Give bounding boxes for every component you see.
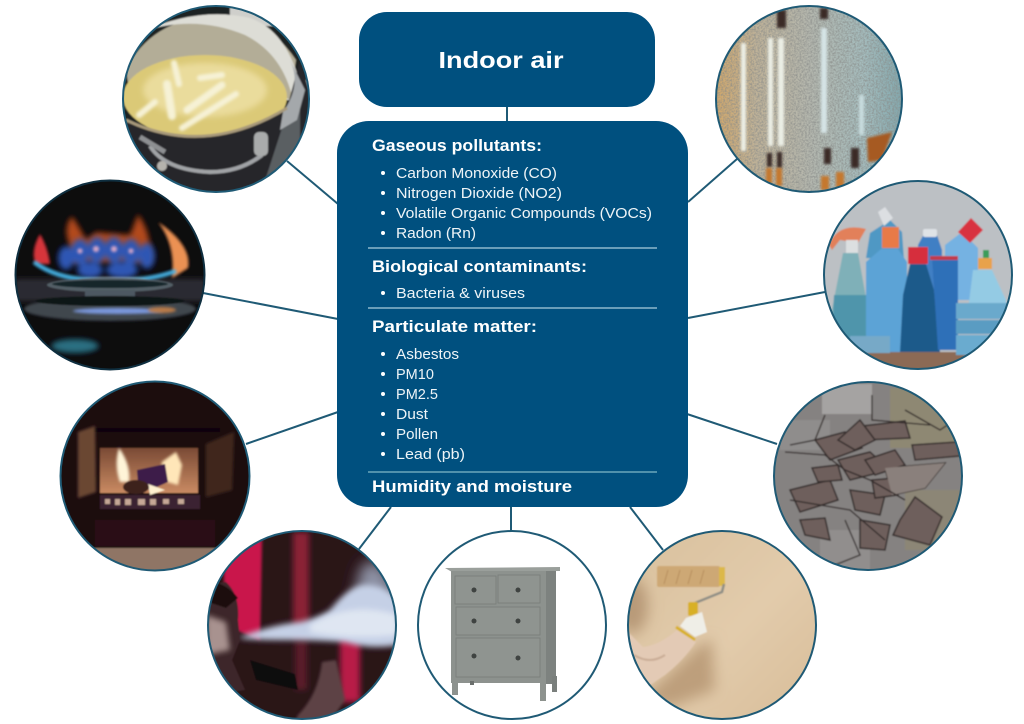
list: gaseous pollutants: Radon (Rn) [396,226,476,242]
list: gaseous pollutants: Nitrogen Dioxide (NO2) [396,186,562,202]
list: gaseous pollutants: Volatile Organic Compounds (VOCs) [396,206,652,222]
icon: broken floor tiles [772,380,964,572]
icon: person vaping [206,529,398,722]
icon: chest of drawers [418,531,606,719]
list: gaseous pollutants: Carbon Monoxide (CO) [396,166,557,182]
icon: cleaning bottles [822,178,1016,372]
heading: gaseous pollutants: Gaseous pollutants: [372,136,542,155]
heading: biological contaminants: Biological contaminants: [372,257,587,276]
list: particulate matter: Pollen [396,427,438,443]
connector lines [203,107,825,550]
title box [359,12,655,107]
list: particulate matter: Lead (pb) [396,447,465,463]
list: gaseous pollutants [381,166,652,242]
list: particulate matter: PM2.5 [396,387,438,403]
list: particulate matter: Asbestos [396,347,459,363]
heading: humidity and moisture: Humidity and moisture [372,477,572,496]
list: biological contaminants: Bacteria & viruses [396,286,525,302]
icon: painting a wall [616,529,818,721]
icon: window condensation [714,4,906,196]
list: particulate matter: Dust [396,407,428,423]
icon: gas burner flame [14,178,206,372]
panel: pollutant categories [337,121,688,507]
title: Indoor air [438,47,564,73]
icon: fireplace [58,378,253,575]
icon: frying pot [120,4,312,200]
heading: particulate matter: Particulate matter: [372,317,537,336]
list: particulate matter: PM10 [396,367,434,383]
list: particulate matter [381,347,465,463]
